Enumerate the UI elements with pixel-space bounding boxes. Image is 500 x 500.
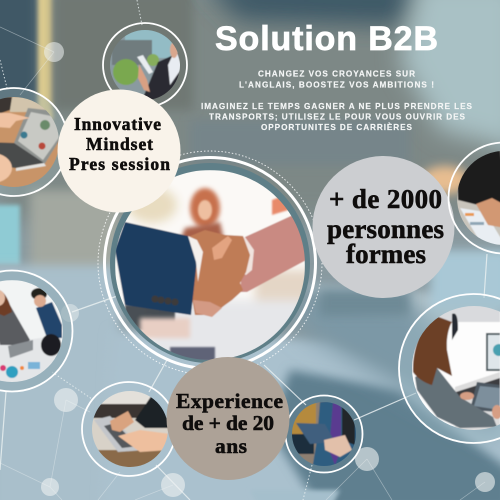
stat circle: Experience de + de 20 ans: Experience: [176, 389, 283, 413]
central photo: handshake: [98, 151, 322, 375]
stat circle: + de 2000 personnes formes: + de 2000: [329, 184, 442, 214]
photo: man with tablet: [286, 396, 362, 472]
stat circle: Innovative Mindset Pres session: [58, 90, 180, 212]
stat circle: + de 2000 personnes formes: [312, 156, 454, 298]
intro text: IMAGINEZ LE TEMPS GAGNER A NE PLUS PRENDRE LES: [201, 102, 473, 111]
stat circle: Experience de + de 20 ans: de + de 20: [182, 411, 274, 435]
photo: typing on laptop: [82, 382, 176, 476]
intro text: TRANSPORTS; UTILISEZ LE POUR VOUS OUVRIR DES: [209, 112, 466, 122]
photo: woman with phone: [103, 23, 187, 107]
stat circle: + de 2000 personnes formes: personnes: [327, 214, 444, 244]
intro text: OPPORTUNITES DE CARRIÈRES: [261, 122, 413, 132]
photo: laptop with charts: [0, 88, 68, 196]
stat circle: Innovative Mindset Pres session: Mindset: [86, 134, 153, 154]
intro text: L'ANGLAIS, BOOSTEZ VOS AMBITIONS !: [239, 80, 434, 90]
photo: hands on documents: [448, 142, 500, 254]
stat circle: Innovative Mindset Pres session: Innovative: [74, 114, 161, 134]
photo: woman at laptop: [399, 294, 500, 443]
stat circle: + de 2000 personnes formes: formes: [346, 239, 426, 269]
stat circle: Experience de + de 20 ans: ans: [215, 434, 247, 458]
stat circle: Innovative Mindset Pres session: Pres session: [69, 154, 170, 174]
photo: team around a table: [0, 270, 72, 392]
intro text: CHANGEZ VOS CROYANCES SUR: [258, 70, 415, 78]
title: Solution B2B: [215, 20, 438, 58]
stat circle: Experience de + de 20 ans: [166, 357, 290, 480]
intro text: [201, 70, 473, 132]
